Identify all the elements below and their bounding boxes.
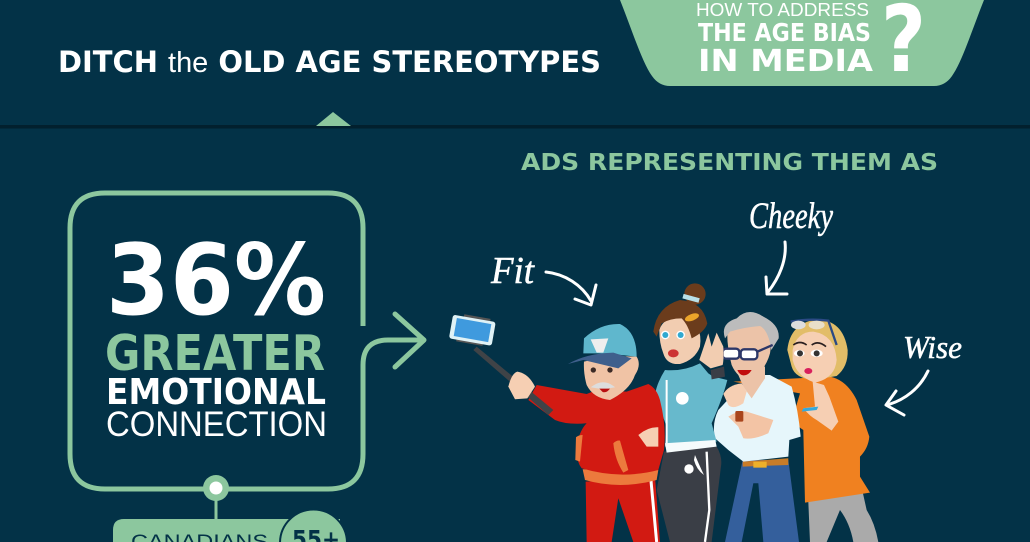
title: DITCH the OLD AGE STEREOTYPES [58,45,601,79]
panel: 36% stat: EMOTIONAL [106,372,326,413]
label: Canadians 55+ [113,510,346,542]
panel: 36% stat: 36% [106,224,326,338]
banner: how to address the age bias in media: IN MEDIA [698,44,874,79]
banner: how to address the age bias in media: THE AGE BIAS [698,18,871,47]
panel: 36% stat: GREATER [105,325,325,382]
arrow: Fit [546,272,596,305]
banner: how to address the age bias in media [620,0,984,93]
panel: 36% stat: CONNECTION [106,405,327,444]
header pointer triangle [316,112,351,126]
character: man in red tracksuit with selfie stick [449,314,665,542]
label: Cheeky: Cheeky [749,196,833,237]
character: woman in orange [733,319,878,542]
character: man in white shirt [714,312,801,542]
arrow: Cheeky [766,242,787,294]
arrow: Wise [886,371,928,415]
connector node [203,475,229,521]
banner: how to address the age bias in media: HOW TO ADDRESS [696,0,869,20]
label: Fit: Fit [490,250,535,292]
label: Wise: Wise [903,329,962,365]
character: woman in teal hoodie [653,283,727,542]
illustration: four older adults taking a selfie [449,283,878,542]
subheading: ADS REPRESENTING THEM AS [521,150,938,176]
panel: 36% stat [70,193,424,489]
